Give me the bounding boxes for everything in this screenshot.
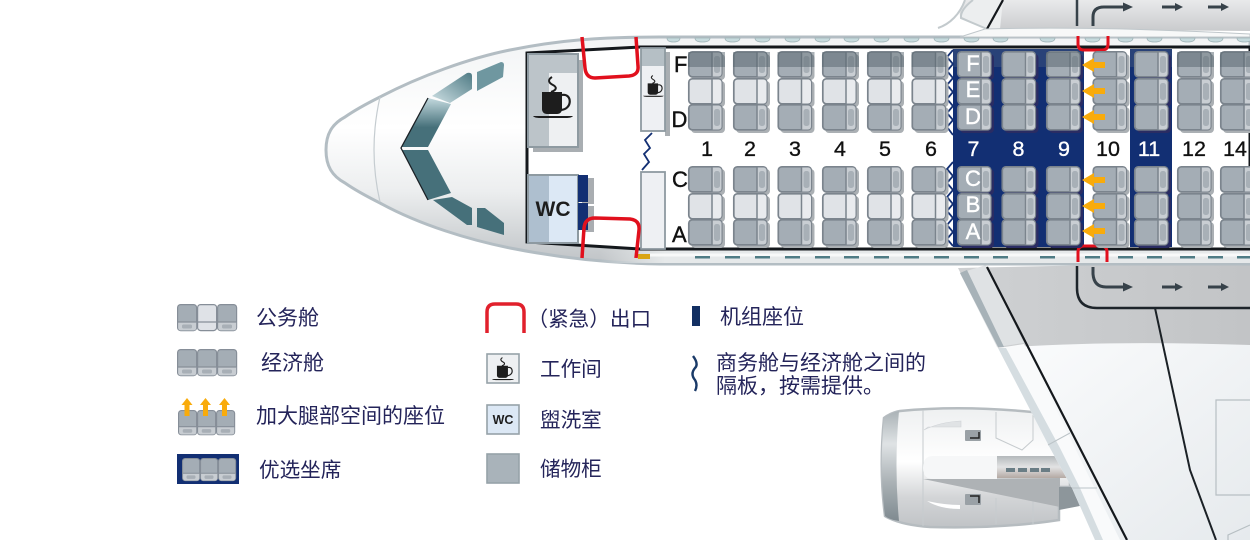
cabin floor xyxy=(527,47,1250,249)
row numbers: 4 xyxy=(834,137,846,161)
seat letters front: C xyxy=(672,167,688,192)
exit: front upper xyxy=(582,37,638,78)
row numbers: 10 xyxy=(1096,137,1120,161)
seat rows 12 and 14 xyxy=(1177,52,1250,248)
legend: storage xyxy=(487,454,602,483)
lavatory xyxy=(528,175,578,243)
legend: divider: 隔板，按需提供。 xyxy=(716,375,884,398)
legend: business class: 公务舱 xyxy=(256,307,319,330)
legend: divider xyxy=(692,352,926,398)
seat letters row 7: A xyxy=(966,219,981,244)
galley right xyxy=(641,48,670,136)
legend: economy class: 经济舱 xyxy=(261,352,324,375)
legend: galley: 工作间 xyxy=(540,358,602,381)
row numbers: 7 xyxy=(968,137,979,161)
seat row 10 extra legroom xyxy=(1093,52,1130,248)
exit: front lower xyxy=(582,218,639,258)
seat letters front: F xyxy=(674,52,687,77)
seat letters row 7: D xyxy=(965,104,981,129)
seat letters front: A xyxy=(672,222,687,247)
row numbers: 2 xyxy=(744,137,756,161)
crew seats xyxy=(578,175,594,232)
seat letters row 7: C xyxy=(965,166,981,191)
row numbers: 5 xyxy=(879,137,891,161)
icon: small coffee cup xyxy=(643,76,664,97)
engine pylon xyxy=(923,456,1070,479)
legend: divider: 商务舱与经济舱之间的 xyxy=(716,352,926,375)
row numbers: 8 xyxy=(1013,137,1025,161)
row numbers: 1 xyxy=(701,137,713,161)
seat letters row 7: E xyxy=(966,77,980,102)
legend: lavatory: WC xyxy=(493,413,513,427)
fuselage xyxy=(326,28,1250,264)
engine vent upper xyxy=(965,430,981,441)
row numbers: 9 xyxy=(1058,137,1070,161)
divider zigzag front xyxy=(642,133,652,170)
legend: lavatory: 盥洗室 xyxy=(540,409,602,432)
arrow: upper aisle 2 xyxy=(1208,3,1229,11)
seat rows 7 to 9 preferred xyxy=(958,52,1083,248)
galley forward xyxy=(528,54,583,152)
seat rows 1 to 6 xyxy=(688,52,948,248)
legend: galley xyxy=(487,354,602,383)
legend: emergency exit xyxy=(487,304,651,333)
legend: extra legroom xyxy=(179,398,445,435)
seat letters row 7: B xyxy=(966,192,980,217)
legend: business class xyxy=(178,305,319,331)
exit: overwing upper xyxy=(1078,36,1108,50)
legend: emergency exit: （紧急）出口 xyxy=(528,308,651,331)
seat letters front: D xyxy=(672,107,687,132)
lower windows xyxy=(695,256,1250,258)
engine vent lower xyxy=(965,494,981,505)
icon: coffee cup xyxy=(533,77,573,118)
row numbers xyxy=(701,137,1247,161)
legend: economy class xyxy=(178,350,324,376)
seat letters front xyxy=(672,52,688,247)
arrow: upper exit path xyxy=(1093,2,1133,26)
row numbers: 12 xyxy=(1182,137,1206,161)
class divider zigzag xyxy=(947,50,953,246)
arrow: lower aisle 2 xyxy=(1208,283,1229,291)
storage cabinet right xyxy=(641,172,665,249)
seat letters row 7 xyxy=(965,51,981,244)
row numbers: 14 xyxy=(1223,137,1247,161)
WC label: WC xyxy=(536,198,570,221)
exit: overwing lower xyxy=(1078,246,1107,262)
row numbers: 11 xyxy=(1138,137,1160,161)
gold door marker xyxy=(638,254,650,259)
row numbers: 6 xyxy=(925,137,937,161)
legend: crew seat: 机组座位 xyxy=(720,306,804,329)
engine xyxy=(882,408,1085,527)
lower wing xyxy=(958,262,1250,540)
legend: preferred seats xyxy=(177,454,341,484)
panel: preferred seating zones xyxy=(953,49,1172,247)
seat row 11 preferred xyxy=(1135,52,1171,248)
arrow: lower aisle 1 xyxy=(1162,283,1183,291)
upper wing xyxy=(938,0,1250,31)
legroom arrows xyxy=(1082,58,1105,238)
arrow: lower exit path xyxy=(1093,267,1133,292)
cockpit windows xyxy=(401,62,504,235)
upper windows xyxy=(667,38,1250,42)
arrow: upper aisle 1 xyxy=(1162,3,1183,11)
legend: preferred seats: 优选坐席 xyxy=(259,459,341,482)
legend: storage: 储物柜 xyxy=(540,458,602,481)
row numbers: 3 xyxy=(789,137,801,161)
legend: lavatory xyxy=(487,405,602,434)
seat letters row 7: F xyxy=(966,51,980,76)
legend: extra legroom: 加大腿部空间的座位 xyxy=(256,405,445,428)
